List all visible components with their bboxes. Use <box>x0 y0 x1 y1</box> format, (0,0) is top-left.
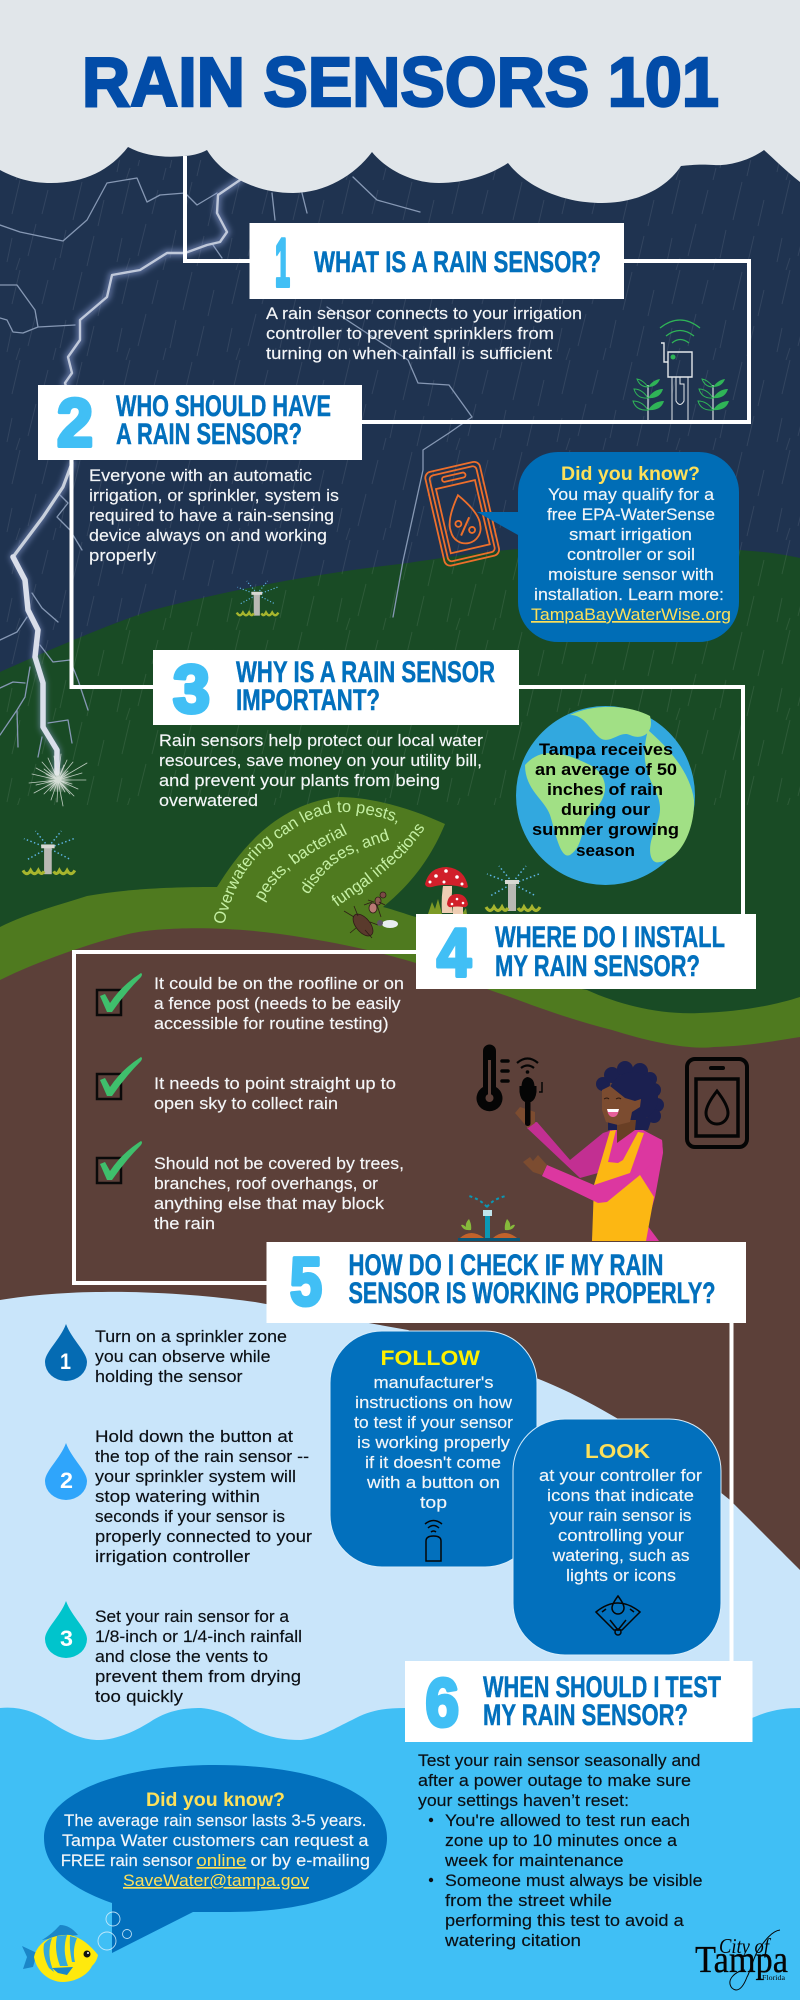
background: light blue water <box>0 1292 800 1800</box>
heading 3 <box>236 656 495 717</box>
globe text: an average of 50 <box>535 760 677 779</box>
callout text: or by e-mailing <box>250 1851 370 1870</box>
step 2: properly connected to your <box>95 1527 312 1546</box>
checklist item 1: a fence post (needs to be easily <box>154 994 401 1013</box>
step 1: Turn on a sprinkler zone <box>95 1327 287 1346</box>
illustration: tropical fish <box>22 1925 98 1982</box>
checklist item 3: anything else that may block <box>154 1194 385 1213</box>
checklist item 1: It could be on the roofline or on <box>154 974 404 993</box>
callout: did you know free rain sensor <box>44 1765 387 1953</box>
face <box>602 1086 641 1125</box>
callout text: installation. Learn more: <box>534 585 724 604</box>
checklist item 2 <box>97 1057 396 1113</box>
heading 6 <box>483 1671 721 1732</box>
callout text <box>531 485 731 624</box>
step 3: Set your rain sensor for a <box>95 1607 290 1626</box>
icon: phone with water percent <box>424 461 500 567</box>
body text 2 <box>89 466 339 565</box>
heading 4 <box>495 921 725 983</box>
globe text <box>532 740 679 860</box>
step 3: prevent them from drying <box>95 1667 301 1686</box>
icon: sprinkler on hill <box>237 581 278 616</box>
callout: follow manufacturer instructions: to test if your sensor <box>354 1413 513 1432</box>
leaf text: overwatering can lead to pests: pests, bacterial <box>256 824 347 903</box>
callout text: Tampa Water customers can request a <box>62 1831 369 1850</box>
callout text: smart irrigation <box>569 525 692 544</box>
body text 6: Someone must always be visible <box>445 1871 702 1890</box>
callout bubble <box>477 452 739 642</box>
body text 6 <box>418 1751 702 1950</box>
step 2: stop watering within <box>95 1487 260 1506</box>
heading box 5 <box>266 1242 746 1323</box>
checklist item 3 <box>97 1141 404 1233</box>
background: deep blue water wave <box>0 1708 800 2000</box>
body text 2: device always on and working <box>89 526 327 545</box>
back arm <box>527 1122 612 1178</box>
body text 6: your settings haven’t reset: <box>418 1791 629 1810</box>
checklist item 1: accessible for routine testing) <box>154 1014 389 1033</box>
illustration: lightning bolts <box>0 177 472 806</box>
callout text: You may qualify for a <box>548 485 715 504</box>
checklist item 2: open sky to collect rain <box>154 1094 338 1113</box>
body text 6: zone up to 10 minutes once a <box>445 1831 678 1850</box>
background: dark green hill <box>0 544 800 1100</box>
globe graphic <box>516 706 695 885</box>
callout: follow manufacturer instructions: FOLLOW <box>380 1347 480 1370</box>
checklist item 3: branches, roof overhangs, or <box>154 1174 378 1193</box>
step 2: seconds if your sensor is <box>95 1507 285 1526</box>
callout text: online <box>196 1851 246 1870</box>
body text 3: resources, save money on your utility bill, <box>159 751 482 770</box>
background: stormy night sky <box>0 0 800 1200</box>
body text 2: Everyone with an automatic <box>89 466 313 485</box>
callout: look at your controller: at your controller for <box>539 1466 702 1485</box>
lightning strike burst <box>29 754 87 806</box>
callout text: The average rain sensor lasts 3-5 years. <box>64 1811 366 1830</box>
hands <box>515 1107 547 1175</box>
body text 6: after a power outage to make sure <box>418 1771 691 1790</box>
number 5: 5 <box>290 1244 322 1320</box>
callout text: TampaBayWaterWise.org <box>531 605 731 624</box>
heading 1: WHAT IS A RAIN SENSOR? <box>314 246 601 279</box>
icon: rain sensor with plants <box>633 320 729 420</box>
heading box 6 <box>405 1661 752 1742</box>
callout: look at your controller: watering, such as <box>551 1546 690 1565</box>
icon: garden pests <box>344 892 398 939</box>
body text 6: performing this test to avoid a <box>445 1911 684 1930</box>
number 3: 3 <box>173 651 210 727</box>
background: bright green ground with overwatering leaf <box>0 797 800 1100</box>
checklist item 1 <box>97 973 404 1033</box>
checklist item 3: the rain <box>154 1214 215 1233</box>
step 1: you can observe while <box>95 1347 270 1366</box>
globe with rainfall fact <box>516 706 695 885</box>
heading 4: MY RAIN SENSOR? <box>495 950 700 983</box>
neck <box>617 1120 636 1143</box>
icon: sprinkler right <box>486 866 540 911</box>
body text 6: week for maintenance <box>444 1851 624 1870</box>
heading 2 <box>116 390 331 451</box>
heading box 2 <box>38 385 362 460</box>
panel: section 6 when should I test <box>405 1661 752 1950</box>
callout: follow manufacturer instructions: top <box>420 1493 447 1512</box>
step 3: and close the vents to <box>95 1647 268 1666</box>
callout: follow manufacturer instructions: with a button on <box>366 1473 500 1492</box>
background: rain streaks <box>0 160 800 805</box>
callout: look at your controller: controlling your <box>558 1526 684 1545</box>
icon: mushrooms <box>425 867 468 914</box>
callout text <box>61 1811 370 1890</box>
body text 3: and prevent your plants from being <box>159 771 440 790</box>
step 2: irrigation controller <box>95 1547 250 1566</box>
body text 6: from the street while <box>445 1891 612 1910</box>
heading 2: A RAIN SENSOR? <box>116 418 302 451</box>
icon: teal sprinkler with seedlings <box>458 1196 520 1241</box>
body text 3: overwatered <box>159 791 258 810</box>
leaf text: overwatering can lead to pests: Overwatering can lead to pests, <box>214 800 398 923</box>
callout heading: Did you know? <box>146 1790 285 1811</box>
connector lines between sections <box>72 156 749 1661</box>
callout text: FREE rain sensor <box>61 1851 193 1870</box>
illustration: woman testing sensor <box>515 1061 664 1241</box>
callout: follow manufacturer instructions: if it doesn't come <box>365 1453 501 1472</box>
icon: thermometer <box>476 1044 508 1111</box>
number 2: 2 <box>57 385 93 461</box>
speech bubble <box>44 1765 387 1953</box>
globe text: inches of rain <box>547 780 663 799</box>
callout text: controller or soil <box>567 545 695 564</box>
panel: section 1 what is a rain sensor <box>250 223 729 420</box>
icon: sensor held in hand <box>517 1058 542 1102</box>
heading 5 <box>348 1249 716 1310</box>
callout text: moisture sensor with <box>548 565 714 584</box>
callout: look at your controller: icons that indicate <box>547 1486 694 1505</box>
callout: follow manufacturer instructions: instructions on how <box>355 1393 513 1412</box>
callout: did you know water sense <box>477 452 739 642</box>
step 2: the top of the rain sensor -- <box>95 1447 309 1466</box>
heading 3: WHY IS A RAIN SENSOR <box>236 656 495 689</box>
callout: look at your controller: LOOK <box>585 1441 651 1463</box>
step 3: 3 <box>60 1626 73 1651</box>
hair <box>596 1061 664 1130</box>
icon: rain sensor signal <box>425 1520 442 1561</box>
panel: section 4 where do I install <box>97 914 756 1241</box>
icon: phone with water drop <box>687 1059 747 1147</box>
step 2: 2 <box>60 1468 73 1493</box>
callout text: SaveWater@tampa.gov <box>123 1871 310 1890</box>
step 1: 1 <box>60 1349 71 1374</box>
heading box 1 <box>250 223 624 299</box>
heading 2: WHO SHOULD HAVE <box>116 390 331 423</box>
step 1: holding the sensor <box>95 1367 243 1386</box>
number 6: 6 <box>426 1665 459 1741</box>
logo: City of Tampa: City of <box>719 1934 772 1958</box>
heading box 4 <box>416 914 756 989</box>
panel: section 3 why is a rain sensor important <box>153 650 695 923</box>
heading box 3 <box>153 650 519 725</box>
globe text: Tampa receives <box>539 740 673 759</box>
eyes and mouth <box>604 1098 621 1117</box>
icon: controller gauge <box>596 1596 640 1635</box>
globe text: during our <box>561 800 650 819</box>
body text 1: turning on when rainfall is sufficient <box>266 344 552 363</box>
callout: look at your controller <box>513 1419 721 1655</box>
callout text: free EPA-WaterSense <box>547 505 715 524</box>
body text 1 <box>266 304 582 363</box>
step 2 <box>45 1427 312 1566</box>
callout heading: Did you know? <box>561 464 700 485</box>
front arm <box>542 1135 663 1203</box>
number 4: 4 <box>437 915 471 991</box>
body text 6: You're allowed to test run each <box>445 1811 690 1830</box>
callout: look at your controller: your rain sensor is <box>550 1506 692 1525</box>
body text 6: Test your rain sensor seasonally and <box>418 1751 700 1770</box>
background: cloud header <box>0 0 800 203</box>
body text 3: Rain sensors help protect our local water <box>159 731 483 750</box>
step 2: Hold down the button at <box>95 1427 293 1446</box>
step 3: 1/8-inch or 1/4-inch rainfall <box>95 1627 302 1646</box>
callout: follow manufacturer instructions: manufacturer's <box>374 1373 494 1392</box>
torso <box>592 1130 663 1241</box>
title: RAIN SENSORS 101 <box>82 43 719 121</box>
globe text: summer growing <box>532 820 679 839</box>
body text 6: watering citation <box>444 1931 581 1950</box>
body text 1: A rain sensor connects to your irrigation <box>266 304 582 323</box>
callout: follow manufacturer instructions <box>330 1331 537 1567</box>
leaf text: overwatering can lead to pests: diseases, and <box>302 828 389 894</box>
checklist item 3: Should not be covered by trees, <box>154 1154 404 1173</box>
globe text: season <box>576 841 635 860</box>
leaf text: overwatering can lead to pests: fungal infections <box>332 824 424 906</box>
icon: sprinkler left <box>23 831 75 874</box>
heading 6: MY RAIN SENSOR? <box>483 1699 688 1732</box>
step 2: your sprinkler system will <box>95 1467 296 1486</box>
sensor handle <box>525 1100 530 1126</box>
heading 3: IMPORTANT? <box>236 684 380 717</box>
body text 2: required to have a rain-sensing <box>89 506 334 525</box>
body text 3 <box>159 731 483 810</box>
step 3 <box>45 1601 302 1706</box>
callout: follow manufacturer instructions: is working properly <box>357 1433 511 1452</box>
apron <box>592 1130 654 1241</box>
panel: section 5 how do I check <box>45 1242 746 1706</box>
body text 2: irrigation, or sprinkler, system is <box>89 486 339 505</box>
step 3: too quickly <box>95 1687 184 1706</box>
logo: City of Tampa: Tampa <box>695 1939 788 1981</box>
callout: look at your controller: lights or icons <box>566 1566 676 1585</box>
logo: City of Tampa <box>695 1930 788 1990</box>
step 1 <box>45 1324 287 1386</box>
heading 5: HOW DO I CHECK IF MY RAIN <box>348 1249 664 1282</box>
logo: City of Tampa: Florida <box>762 1974 786 1982</box>
background: brown soil <box>0 928 800 1600</box>
checklist item 2: It needs to point straight up to <box>154 1074 396 1093</box>
body text 1: controller to prevent sprinklers from <box>266 324 554 343</box>
panel: section 1 what is a rain sensor: 1 <box>275 225 290 301</box>
icon: bubbles <box>98 1912 132 1950</box>
body text 2: properly <box>89 546 157 565</box>
panel: section 2 who should have a rain sensor <box>38 385 739 642</box>
